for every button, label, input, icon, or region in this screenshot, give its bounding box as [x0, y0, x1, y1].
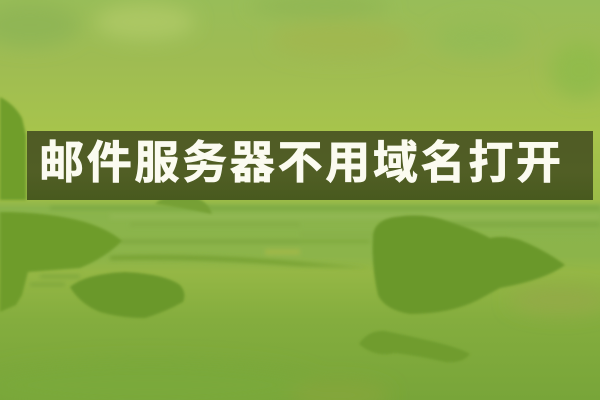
water streaks	[50, 206, 600, 210]
title text: 邮件服务器不用域名打开	[39, 137, 564, 188]
rock: left large	[0, 212, 122, 312]
title banner	[27, 131, 593, 200]
rock: lower right small	[359, 331, 470, 362]
rock: right large	[373, 215, 565, 314]
rock: center left	[70, 272, 184, 318]
rock: upper left behind banner	[0, 97, 26, 200]
rock: small behind banner bottom	[155, 196, 212, 214]
